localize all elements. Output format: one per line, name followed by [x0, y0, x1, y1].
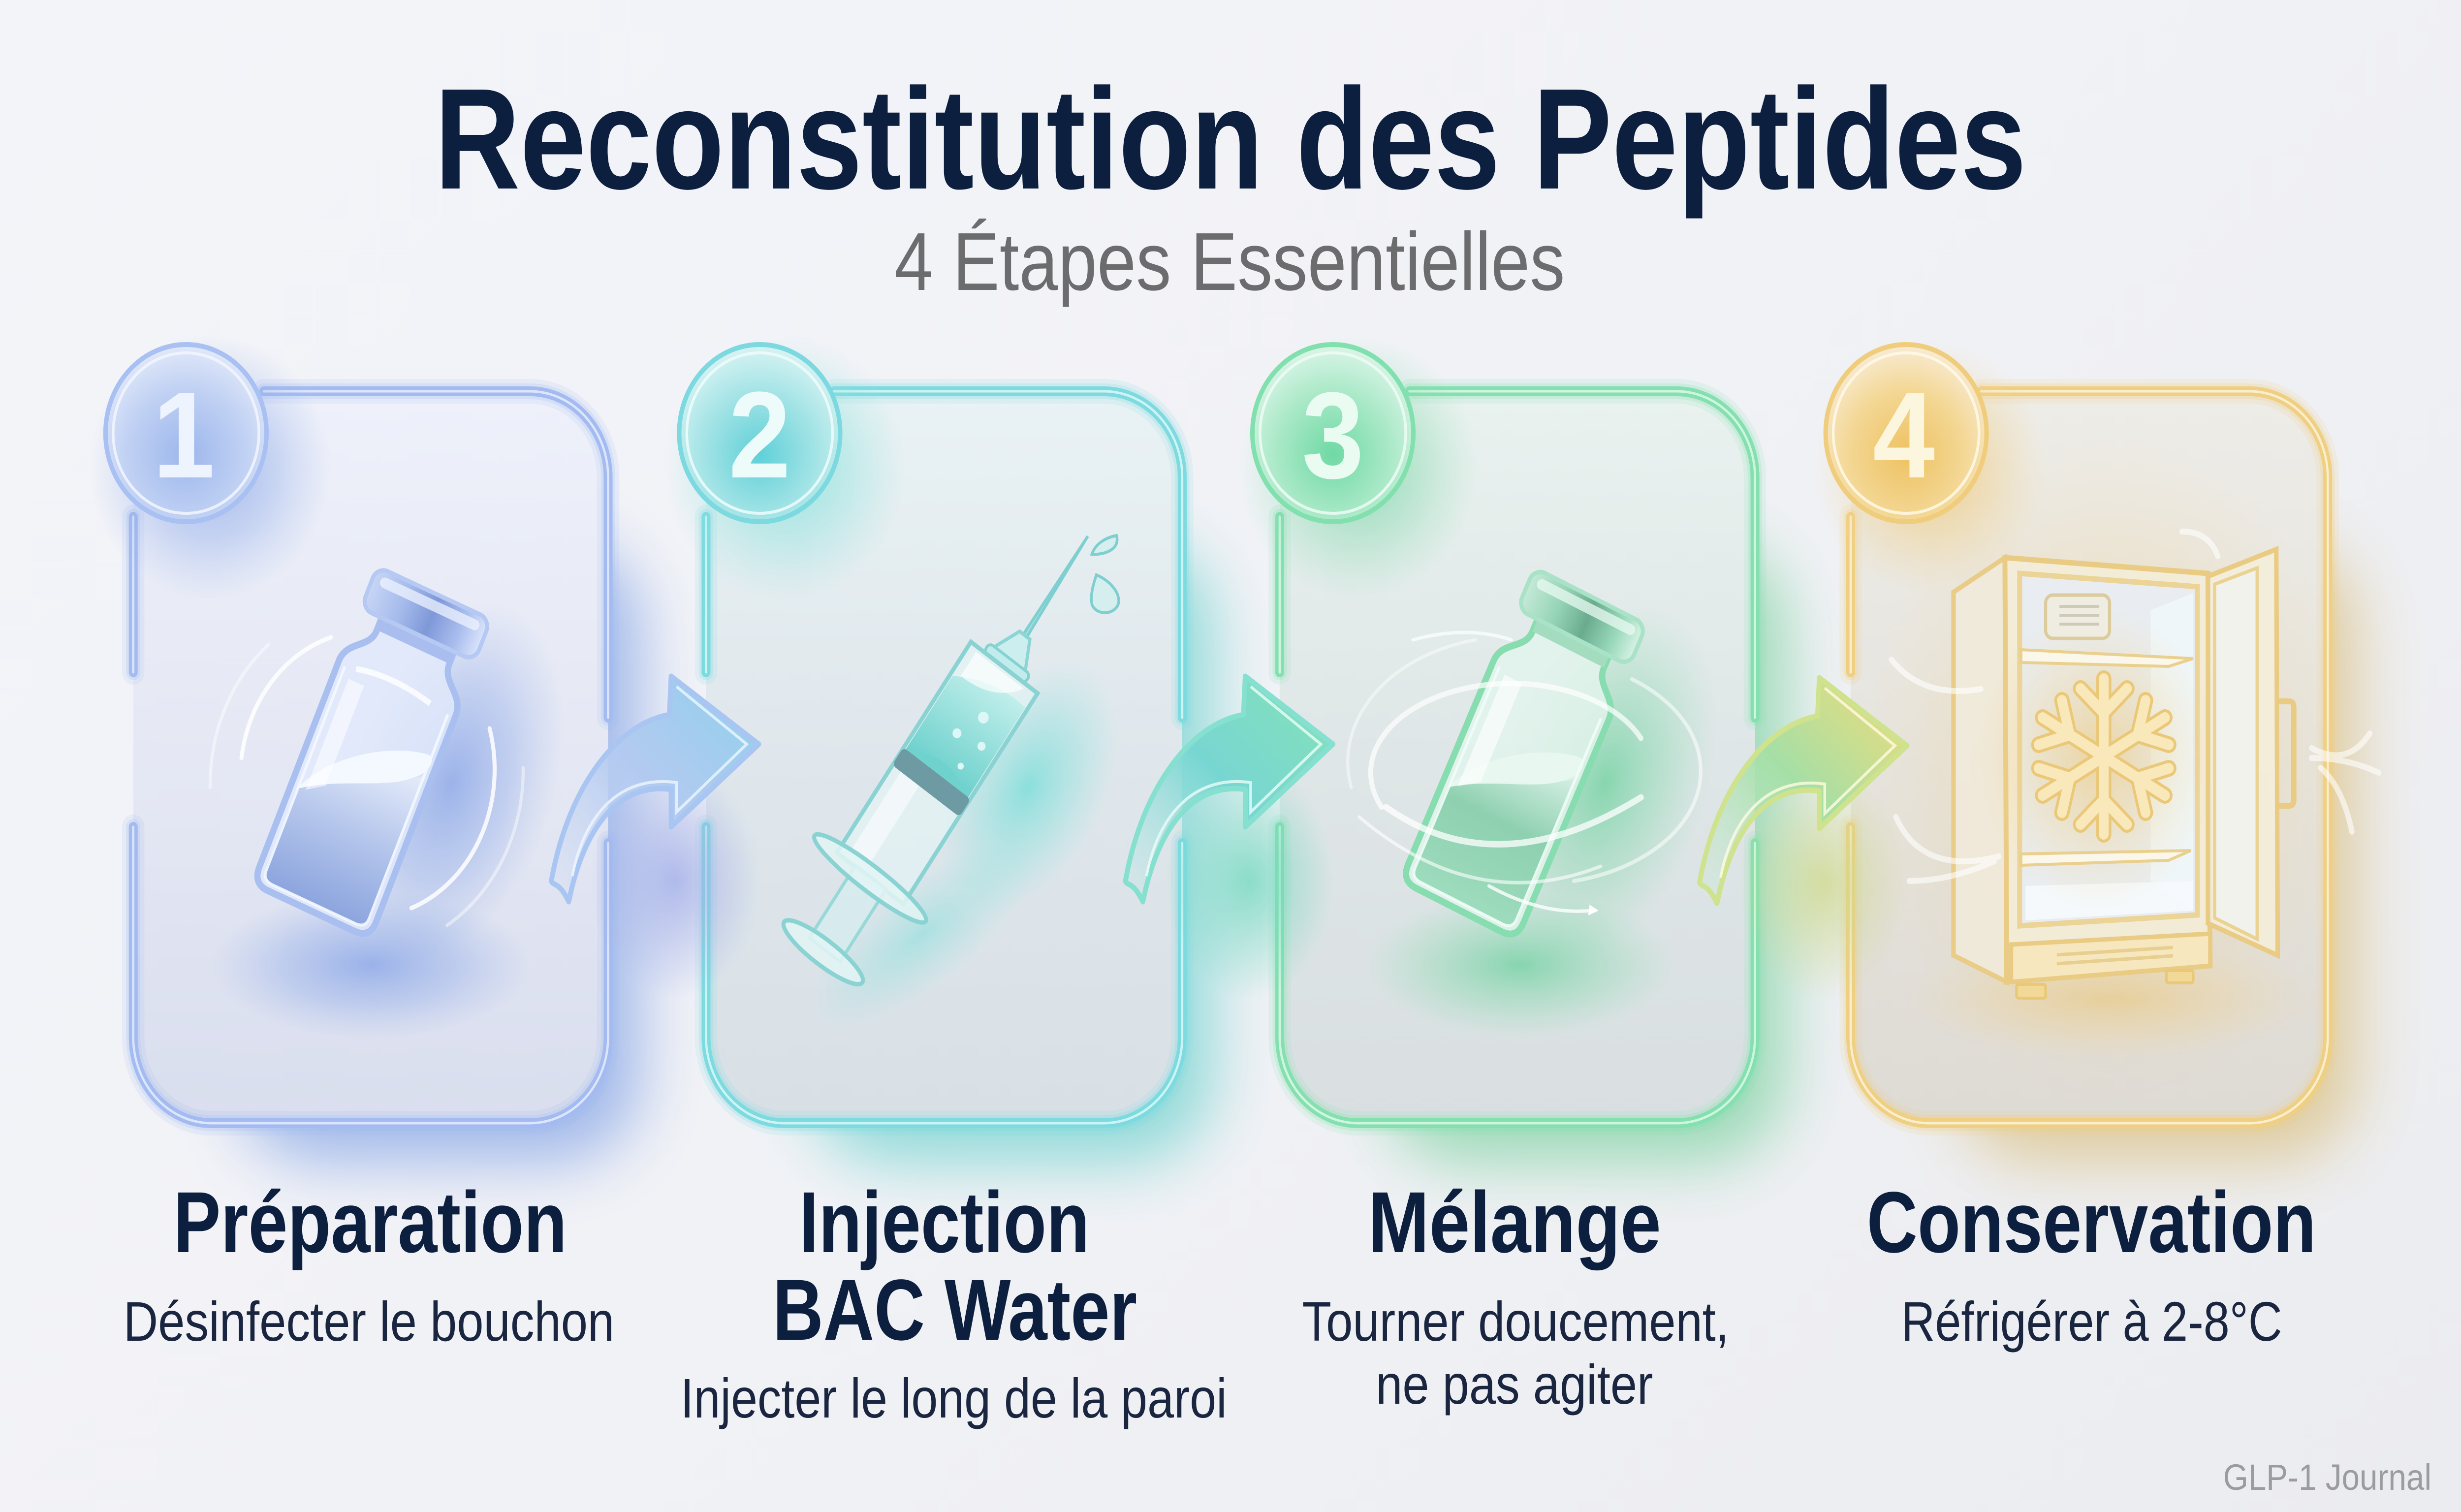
text: step 2: Injecter le long de la paroi	[681, 1367, 1227, 1429]
icon: swirling vial	[1348, 567, 1760, 1039]
subtitle: 4 Étapes Essentielles	[894, 216, 1565, 308]
text: step 4: Conservation	[1867, 1174, 2316, 1271]
fridge front frame	[2005, 558, 2210, 982]
text: step 1	[124, 1174, 614, 1353]
fridge base	[2011, 934, 2210, 982]
card 2 border	[706, 391, 1182, 1123]
card 3 border	[1280, 391, 1755, 1123]
icon: syringe	[761, 493, 1157, 1064]
glass card 4	[1851, 391, 2328, 1123]
text: step 2: Injection	[799, 1174, 1090, 1271]
fridge shelves	[2021, 650, 2193, 666]
text: step 2	[681, 1174, 1227, 1429]
number 4: 4	[1873, 366, 1935, 504]
card 4 border	[1851, 391, 2328, 1123]
badge 2	[664, 335, 906, 600]
text: step 3	[1302, 1174, 1729, 1416]
icon: powder vial	[210, 566, 606, 1039]
glass card 3	[1280, 391, 1755, 1123]
text: step 1: Préparation	[173, 1174, 567, 1271]
badge 1	[90, 335, 331, 600]
arrow: step 1 to 2	[551, 676, 760, 999]
glass card 2	[706, 391, 1182, 1123]
arrow: step 3 to 4	[1700, 678, 1908, 1001]
panel: step 4 fridge	[1813, 340, 2379, 1123]
text: step 3: Tourner doucement,	[1302, 1290, 1729, 1353]
panel: step 1 vial	[90, 335, 608, 1123]
glass card 1	[133, 391, 608, 1123]
text: step 4	[1867, 1174, 2316, 1353]
fridge door	[2208, 549, 2278, 955]
badge 4	[1813, 340, 2046, 596]
number 1: 1	[153, 366, 215, 504]
vent box	[2046, 595, 2110, 638]
fridge interior	[2019, 573, 2197, 926]
panel: step 3 mixing	[1237, 335, 1760, 1123]
text: step 4: Réfrigérer à 2-8°C	[1901, 1290, 2282, 1353]
fridge side panel	[1954, 558, 2007, 982]
text: step 3: ne pas agiter	[1376, 1353, 1653, 1416]
snowflake	[2031, 679, 2177, 834]
card 1 border	[133, 391, 608, 1123]
text: step 2: BAC Water	[773, 1261, 1137, 1358]
text: step 1: Désinfecter le bouchon	[124, 1290, 614, 1353]
icon: open fridge with snowflake	[1860, 433, 2379, 1102]
arrow: step 2 to 3	[1126, 676, 1334, 999]
panel: step 2 syringe	[664, 335, 1182, 1123]
number 2: 2	[728, 366, 791, 504]
credit: GLP-1 Journal	[2223, 1457, 2431, 1498]
text: step 3: Mélange	[1368, 1174, 1661, 1271]
number 3: 3	[1302, 367, 1364, 504]
title: Reconstitution des Peptides	[435, 59, 2026, 220]
cold mist wisps	[1892, 532, 2379, 881]
badge 3	[1237, 335, 1479, 600]
